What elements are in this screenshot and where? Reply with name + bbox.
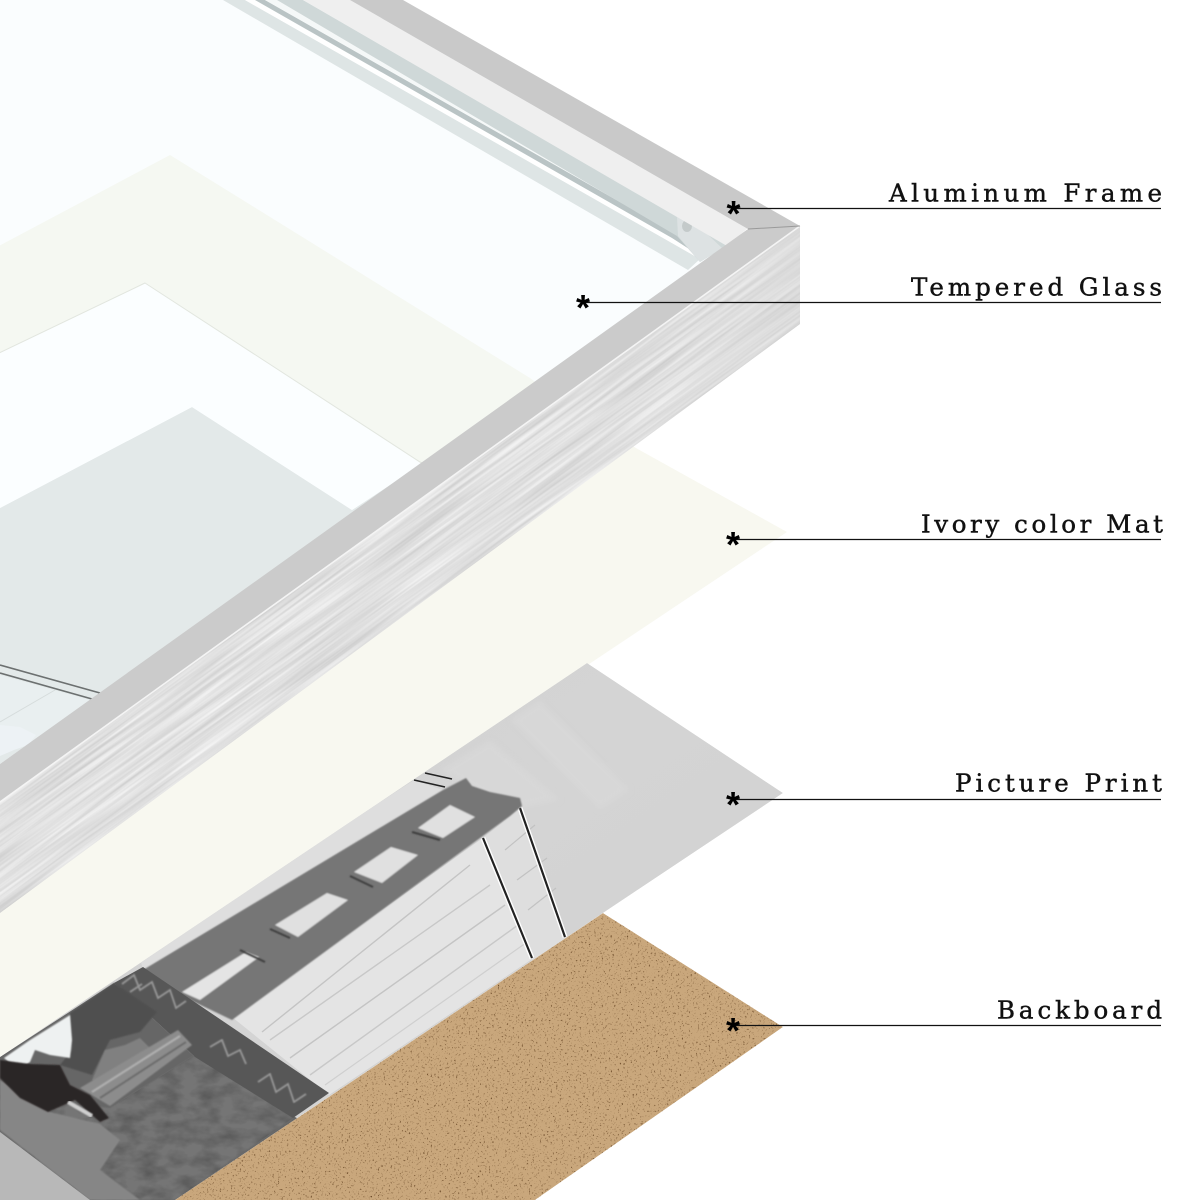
bridge cables [414, 773, 565, 958]
bridge upper sky strip [140, 780, 443, 970]
panel: ivory color mat [0, 428, 787, 1057]
asterisk: * [726, 193, 741, 234]
panel: backboard [175, 913, 785, 1200]
callout: tempered glass [576, 272, 1162, 328]
highlight line two [265, 0, 678, 235]
dark pillar [0, 1060, 109, 1122]
bridge truss [114, 967, 329, 1118]
asterisk: * [576, 287, 590, 328]
leader line [734, 798, 1161, 800]
highlight edge [0, 226, 800, 802]
mitre line [748, 226, 800, 229]
callout: picture print [726, 768, 1162, 825]
leader line [735, 208, 1161, 210]
tower window four [182, 952, 259, 1000]
highlight line [245, 0, 700, 259]
panel: mat seen through glass [0, 155, 600, 860]
callout: backboard [726, 996, 1162, 1051]
inner rail [277, 0, 728, 262]
front top face [0, 226, 800, 802]
tower window three [275, 893, 348, 937]
leader line [584, 302, 1161, 304]
foreground shore [0, 1080, 140, 1200]
lumps below span [92, 1038, 149, 1080]
truss cell three [258, 1074, 306, 1102]
water mottling [0, 1050, 300, 1200]
top grey face [350, 0, 800, 229]
label: Picture Print [955, 768, 1162, 798]
picture cables [0, 664, 100, 722]
picture sky [0, 407, 388, 764]
dark channel [255, 0, 700, 256]
panel: picture seen through glass [0, 407, 388, 764]
bridge tower [143, 778, 522, 1020]
label: Tempered Glass [911, 272, 1162, 302]
truss cell two [210, 1040, 246, 1064]
asterisk: * [726, 524, 740, 565]
truss cell one [122, 975, 186, 1008]
leader line [734, 1024, 1161, 1026]
tower window one [418, 805, 475, 838]
leader line [734, 538, 1161, 540]
bridge light panel [234, 840, 532, 1095]
label: Ivory color Mat [921, 510, 1163, 538]
shore highlight [68, 1102, 92, 1116]
channel lip [223, 0, 700, 270]
backboard speckle [175, 913, 785, 1200]
white rail band [303, 0, 748, 246]
brushed side face [0, 227, 800, 913]
dark span under truss [60, 983, 157, 1075]
label: Aluminum Frame [888, 178, 1162, 208]
asterisk: * [726, 784, 740, 825]
panel: aluminum frame back rail [223, 0, 800, 270]
corner bracket [677, 217, 722, 262]
mat window opening [0, 283, 460, 800]
panel: picture print [0, 663, 783, 1200]
panel: aluminum frame front rail [0, 226, 800, 913]
backboard base [175, 913, 783, 1200]
asterisk: * [726, 1010, 740, 1051]
label: Backboard [997, 996, 1162, 1024]
tower window two [354, 847, 418, 883]
callout: ivory color mat [726, 510, 1163, 565]
foreground road [0, 1132, 90, 1200]
panel: tempered glass surface [0, 0, 800, 802]
tower cross bracing shadows [240, 832, 440, 962]
lower water area [0, 1055, 293, 1200]
dark base under the span [0, 983, 300, 1200]
mat surface [0, 155, 600, 860]
bridge deck band [80, 1030, 192, 1106]
cloud [4, 1015, 72, 1070]
faint clouds [440, 700, 630, 810]
callout: aluminum frame [726, 178, 1162, 234]
picture cloud fragment [0, 742, 30, 756]
print sky [1, 663, 782, 1118]
bridge tower side panel [492, 811, 566, 960]
